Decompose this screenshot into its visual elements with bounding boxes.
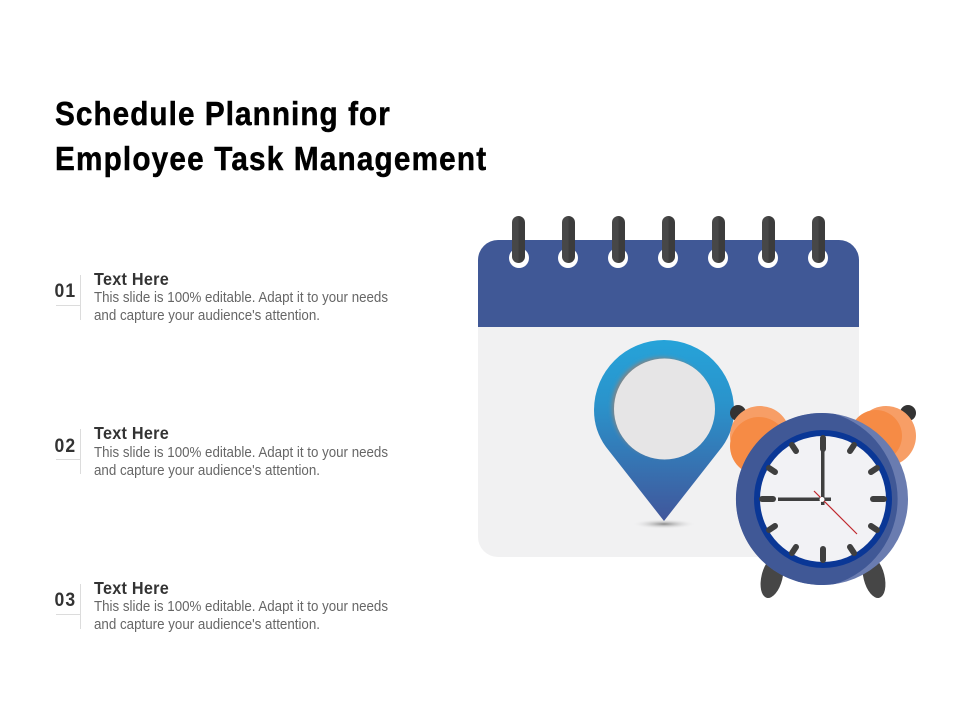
item 02: and capture your audience's attention.	[94, 462, 320, 479]
pin body	[594, 340, 734, 521]
calendar header	[478, 240, 859, 327]
title	[55, 96, 487, 177]
calendar page	[478, 327, 859, 557]
clock hands	[778, 440, 857, 534]
item 01: and capture your audience's attention.	[94, 307, 320, 324]
hour ticks	[762, 438, 884, 560]
item 02	[54, 423, 388, 479]
clock outer ring	[736, 413, 908, 585]
item 02: 02	[54, 434, 75, 456]
title: Schedule Planning for	[55, 96, 390, 132]
item 02: This slide is 100% editable. Adapt it to your needs	[94, 444, 388, 461]
item 03: 03	[54, 588, 75, 610]
title: Employee Task Management	[55, 141, 487, 177]
item 03: Text Here	[94, 578, 169, 598]
map pin	[594, 340, 734, 529]
pin hole	[612, 358, 715, 460]
item 03: This slide is 100% editable. Adapt it to your needs	[94, 598, 388, 615]
alarm clock	[730, 405, 916, 600]
clock bells	[730, 406, 916, 475]
clock navy ring	[754, 430, 892, 568]
item 01	[54, 269, 388, 324]
item 03: and capture your audience's attention.	[94, 616, 320, 633]
pin shadow	[632, 519, 696, 529]
spiral rings	[509, 216, 828, 268]
item 02: Text Here	[94, 423, 169, 443]
item 03	[54, 578, 388, 633]
calendar	[478, 216, 859, 557]
clock bell knobs	[730, 405, 916, 421]
item 01: Text Here	[94, 269, 169, 289]
clock face	[760, 436, 886, 562]
clock feet	[757, 554, 889, 600]
item 01: 01	[54, 279, 75, 301]
item 01: This slide is 100% editable. Adapt it to your needs	[94, 289, 388, 306]
